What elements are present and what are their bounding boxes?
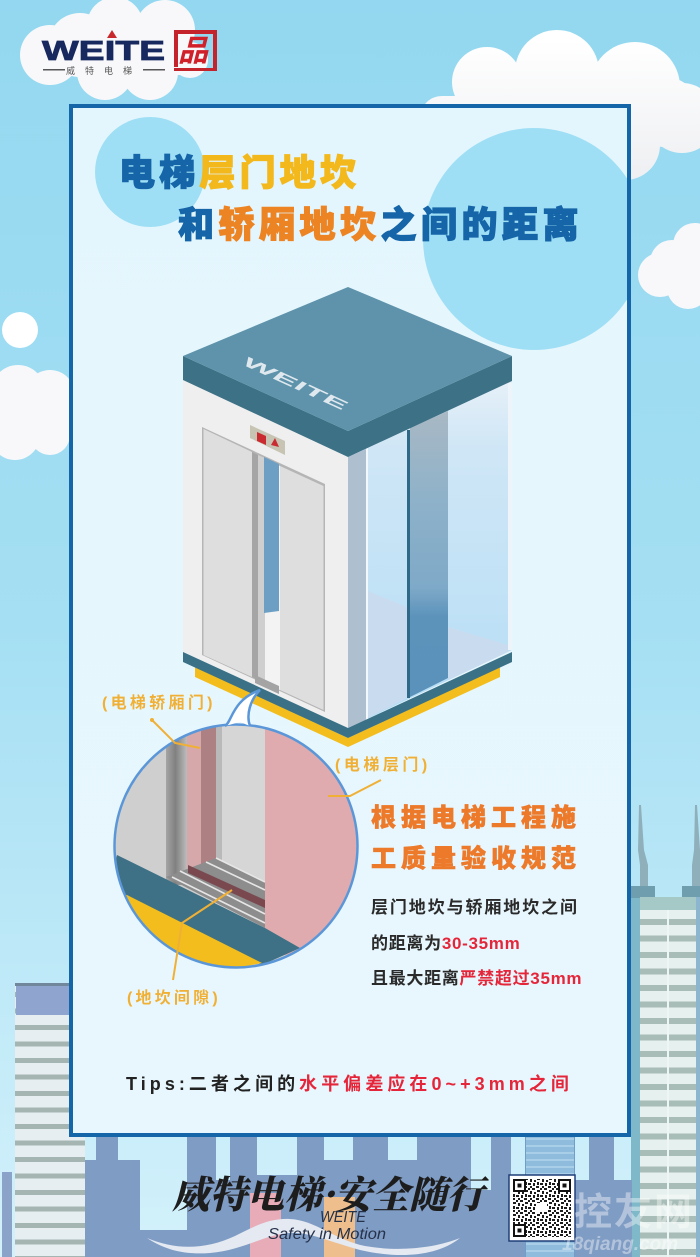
slogan english: WEITE [320,1209,366,1226]
heading: standard [371,804,581,873]
decorative title circles [95,117,645,350]
logo: 威特电梯 [66,65,142,76]
label: sill gap: (地坎间隙) [127,989,221,1007]
slogan: 威特电梯·安全随行 [172,1164,489,1219]
body text: 且最大距离严禁超过35mm [371,968,582,988]
QR code [509,1175,575,1241]
label: car door: (电梯轿厢门) [102,694,216,712]
wave ribbon [147,1219,460,1255]
right tower [631,805,700,1257]
yellow base [195,667,500,747]
title: 电梯层门地坎 [119,152,360,193]
roof side [183,356,512,457]
base band [183,652,512,738]
watermark: 控友网 [574,1192,694,1234]
panel [71,106,629,1135]
front wall [183,375,348,728]
cloud top left [20,0,208,100]
floor indicator [250,425,285,455]
label: sill gap [127,890,232,1007]
slogan english: Safety in Motion [268,1226,386,1243]
door frame and leaves [202,427,325,712]
body text [371,897,582,988]
slogan english [268,1209,386,1243]
heading: standard: 工质量验收规范 [371,844,581,873]
cloud right middle [638,223,700,309]
glass side [348,380,512,728]
cloud top right [420,30,700,180]
body text: 的距离为30-35mm [371,933,520,953]
logo: WEITE [42,35,165,66]
roof logo: WEITE [237,356,352,413]
title [119,152,583,245]
label: landing door: (电梯层门) [335,756,431,774]
callout connector [225,690,260,726]
logo [42,30,217,76]
watermark [562,1192,694,1255]
label: car door [102,694,216,748]
watermark: 18qiang.com [562,1234,678,1255]
body text: 层门地坎与轿厢地坎之间 [371,897,579,917]
title: 和轿厢地坎之间的距离 [178,204,583,245]
roof top [183,287,512,431]
cloud left middle [0,312,75,460]
logo: 品 [178,35,209,68]
bottom skyline [85,1137,632,1257]
tips: Tips:二者之间的水平偏差应在0~+3mm之间 [126,1073,573,1094]
elevator [183,287,512,747]
heading: standard: 根据电梯工程施 [371,804,581,832]
label: landing door [328,756,431,796]
left tower [2,983,85,1257]
magnified circle [105,724,360,975]
